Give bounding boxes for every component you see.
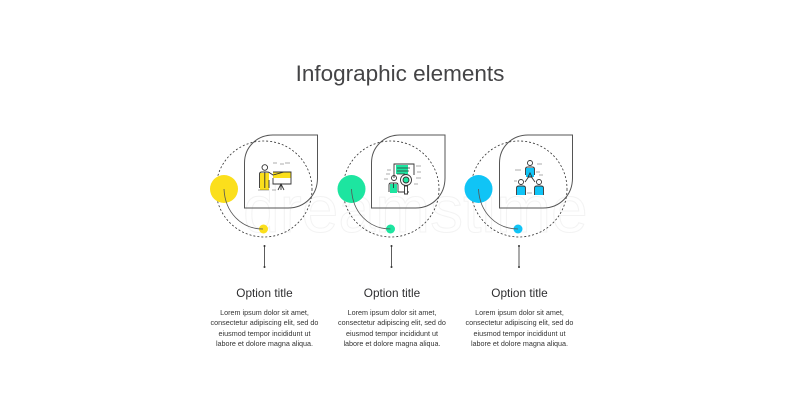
step 3 arrow xyxy=(518,246,520,267)
step 2 small dot xyxy=(386,224,395,234)
title: Infographic elements xyxy=(296,61,504,86)
option text 1: eiusmod tempor incididunt ut xyxy=(219,328,310,338)
option title 1: Option title xyxy=(236,286,293,300)
icon: team hierarchy xyxy=(514,160,544,195)
option text 2: Lorem ipsum dolor sit amet, xyxy=(348,308,436,316)
step 1 large dot xyxy=(210,175,238,203)
step 1 arrow xyxy=(264,246,266,267)
option title 2: Option title xyxy=(364,286,420,300)
step 3 leaf frame xyxy=(500,135,572,208)
step 1 diagram xyxy=(210,135,318,267)
step 2 arrow xyxy=(390,246,392,267)
step 2 large dot xyxy=(338,175,366,203)
option text 1: labore et dolore magna aliqua. xyxy=(216,339,313,348)
step 3 dashed ring xyxy=(471,141,567,237)
option text 3 xyxy=(466,308,574,348)
option text 2: eiusmod tempor incididunt ut xyxy=(346,328,438,338)
step 3 small dot xyxy=(514,224,522,234)
option text 2 xyxy=(338,308,446,348)
option text 2: labore et dolore magna aliqua. xyxy=(343,339,441,348)
icon: certificate and magnifier xyxy=(384,164,421,194)
step 3 connector arc xyxy=(478,189,518,229)
arrow end dots xyxy=(264,245,520,268)
icon: presenter at board xyxy=(258,163,291,190)
step 2 diagram xyxy=(338,135,445,267)
step 2 dashed ring xyxy=(343,141,439,237)
option text 1: consectetur adipiscing elit, sed do xyxy=(211,318,318,327)
option text 1: Lorem ipsum dolor sit amet, xyxy=(220,308,309,316)
option text 3: eiusmod tempor incididunt ut xyxy=(474,328,565,338)
step 1 connector arc xyxy=(224,189,263,229)
step 2 leaf frame xyxy=(372,135,445,208)
option text 3: Lorem ipsum dolor sit amet, xyxy=(475,308,564,316)
step 3 large dot xyxy=(464,175,492,203)
option text 2: consectetur adipiscing elit, sed do xyxy=(338,318,446,327)
option text 3: labore et dolore magna aliqua. xyxy=(471,339,568,348)
option text 3: consectetur adipiscing elit, sed do xyxy=(466,318,573,327)
step 2 connector arc xyxy=(352,189,390,229)
option text 1 xyxy=(210,308,318,348)
step 1 dashed ring xyxy=(216,141,312,237)
step 3 diagram xyxy=(464,135,572,267)
step 1 small dot xyxy=(259,224,268,234)
watermark: dreamstime xyxy=(243,172,588,246)
step 1 leaf frame xyxy=(244,135,318,208)
option title 3: Option title xyxy=(491,286,548,300)
